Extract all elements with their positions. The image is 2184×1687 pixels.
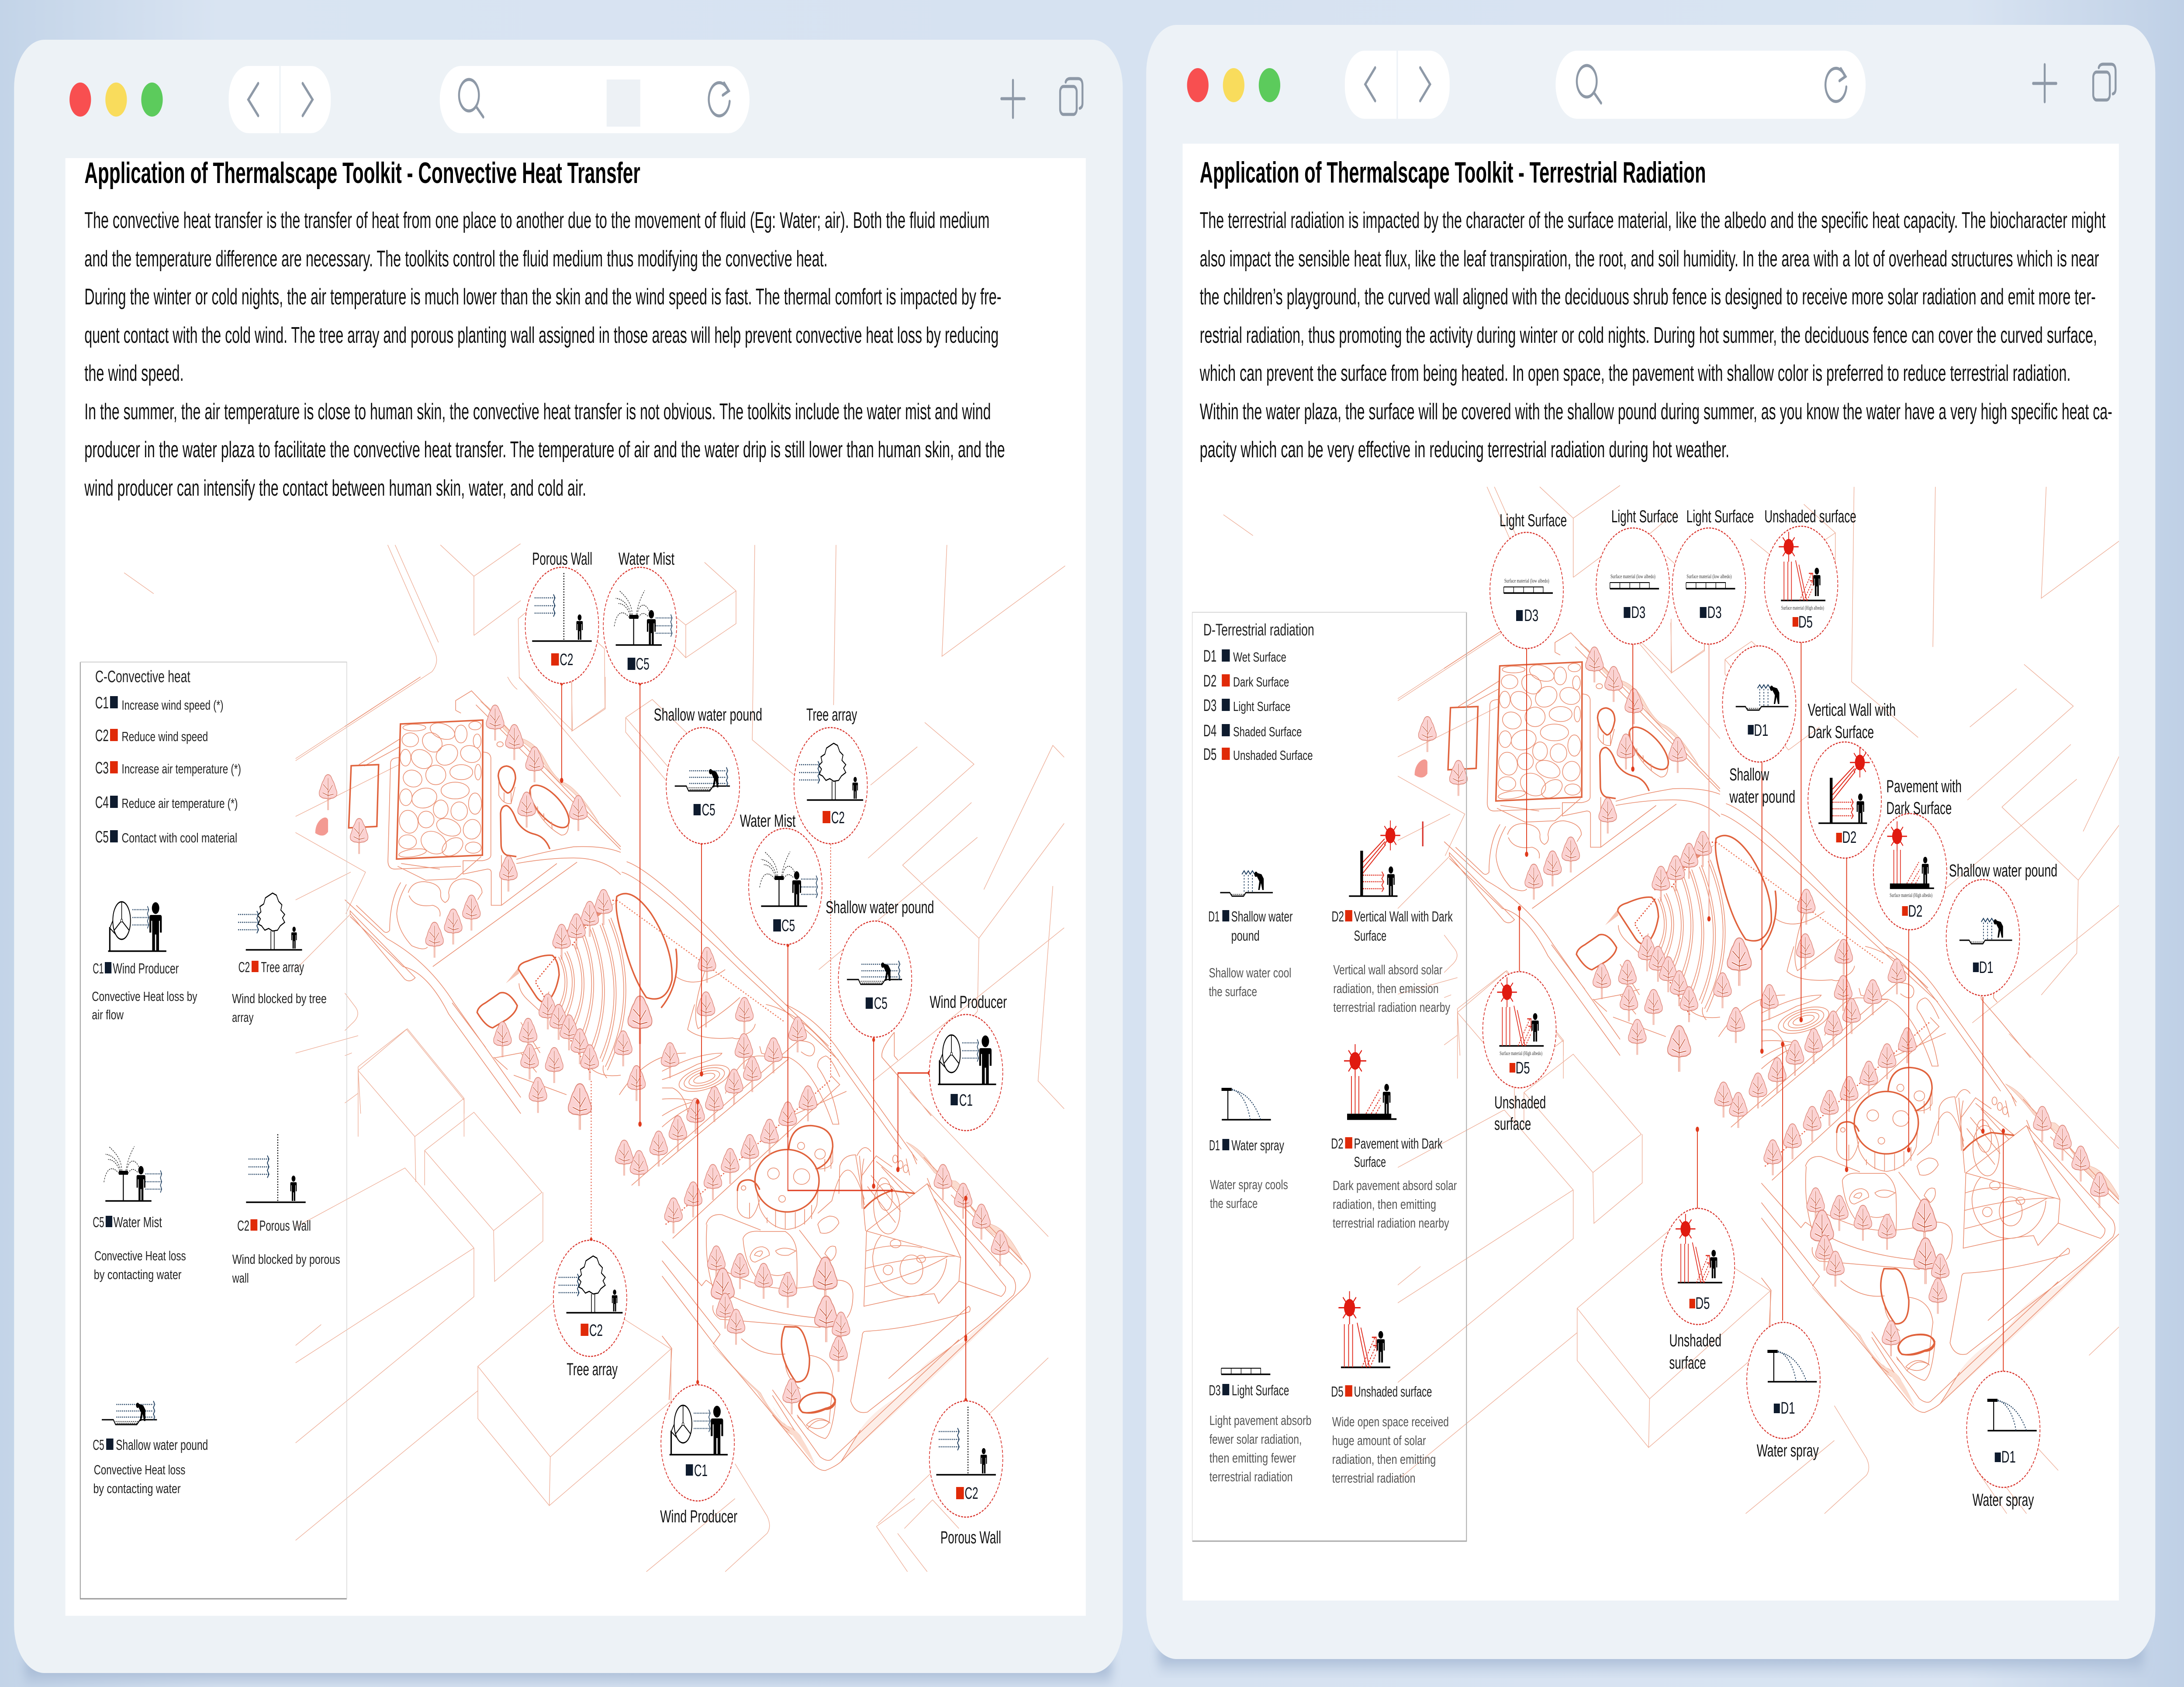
legend item: tree array: Tree array: [261, 959, 304, 975]
callout: vertical wall with dark surface: [1808, 700, 1896, 858]
callout: pavement with dark surface: D2: [1908, 901, 1922, 920]
legend key list: D2: [1203, 671, 1216, 690]
callout: tree array (bottom): C2: [589, 1321, 603, 1339]
legend item: water mist: by contacting water: [94, 1268, 182, 1282]
legend key list: D1: [1203, 646, 1216, 665]
callout: light surface 3: Light Surface: [1686, 507, 1754, 527]
callout: light surface 1: [1490, 511, 1567, 649]
callout: shallow water pound: C5: [702, 800, 715, 819]
callout: unshaded surface (top): Unshaded surface: [1764, 507, 1856, 527]
legend item: porous wall: C2: [237, 1218, 249, 1234]
legend item: wind producer: C1: [93, 960, 104, 976]
legend item: shallow water pound: by contacting water: [93, 1482, 181, 1496]
legend item: wind producer: air flow: [92, 1008, 124, 1022]
legend item: unshaded surface: Wide open space received: [1332, 1415, 1449, 1429]
callout: water spray (middle): Water spray: [1757, 1441, 1819, 1461]
legend item: shallow water pound: [93, 1401, 208, 1496]
callout: light surface 2: Light Surface: [1611, 507, 1678, 527]
legend item: vertical wall with dark surface: Vertical wall absord solar: [1333, 963, 1443, 977]
callout: tree array (top): C2: [831, 808, 845, 827]
panel: terrestrial radiation window: [1146, 25, 2164, 1666]
legend key list: Increase wind speed (*): [122, 698, 224, 713]
callout: porous wall (bottom): Porous Wall: [940, 1528, 1001, 1548]
legend item: water mist: [93, 1146, 186, 1282]
legend item: unshaded surface: Unshaded surface: [1354, 1383, 1432, 1400]
callout: wind producer (bottom): [660, 1385, 737, 1527]
window frame: [1146, 25, 2155, 1659]
callout: light surface 2: D3: [1631, 603, 1645, 621]
legend panel: terrestrial radiation: [1192, 612, 1466, 1541]
legend key list: Shaded Surface: [1233, 725, 1302, 739]
callout: light surface 1: D3: [1524, 606, 1538, 624]
callout: water mist (top): C5: [636, 654, 650, 673]
callout: porous wall (bottom): C2: [965, 1483, 978, 1502]
legend item: pavement with dark surface: Dark pavement absord solar: [1333, 1179, 1457, 1193]
callout: unshaded surface (left): surface: [1494, 1114, 1531, 1134]
legend key list: Reduce air temperature (*): [122, 797, 238, 811]
legend item: porous wall: Wind blocked by porous: [232, 1252, 340, 1267]
page content area: [1182, 144, 2119, 1601]
callout: shallow water pound (right): C5: [874, 994, 888, 1012]
callout: porous wall (top): [525, 549, 598, 683]
legend item: shallow water pound: Shallow water pound: [116, 1437, 208, 1453]
legend item: unshaded surface: [1331, 1291, 1449, 1486]
description text: the wind speed.: [84, 361, 184, 386]
description text: and the temperature difference are necessary. The toolkits control the fluid medium thus modifying the convective heat.: [84, 247, 828, 272]
legend item: water spray: the surface: [1210, 1197, 1258, 1211]
legend item: porous wall: wall: [232, 1271, 249, 1286]
legend item: vertical wall with dark surface: [1332, 821, 1453, 1015]
legend key list: Dark Surface: [1233, 675, 1289, 690]
legend item: unshaded surface: huge amount of solar: [1332, 1434, 1426, 1448]
callout: water mist (middle): Water Mist: [740, 811, 796, 831]
legend key list: [95, 693, 241, 846]
callout: shallow water pound: [654, 705, 762, 844]
legend key list: [1203, 646, 1313, 763]
callout: unshaded surface (bottom): [1661, 1208, 1735, 1373]
description text: also impact the sensible heat flux, like the leaf transpiration, the root, and soil humidity. In the area with a lot of overhead structures which is near: [1200, 247, 2099, 272]
title: Application of Thermalscape Toolkit - Terrestrial Radiation: [1200, 156, 1706, 190]
description text: In the summer, the air temperature is close to human skin, the convective heat transfer is not obvious. The toolkits include the water mist and wind: [84, 400, 991, 424]
legend item: light surface: Light Surface: [1232, 1382, 1289, 1398]
legend item: water spray: D1: [1209, 1137, 1220, 1153]
legend item: wind producer: [92, 902, 197, 1022]
leader lines: [560, 681, 968, 1402]
description text: the children’s playground, the curved wall aligned with the deciduous shrub fence is designed to receive more solar radiation and emit more ter-: [1200, 285, 2096, 310]
description text: During the winter or cold nights, the air temperature is much lower than the skin and the wind speed is fast. The thermal comfort is impacted by fre-: [84, 285, 1002, 310]
callout: light surface 3: Surface material (low albedo): [1686, 573, 1732, 580]
legend key list: D3: [1203, 696, 1216, 714]
legend key list: Unshaded Surface: [1233, 749, 1313, 763]
legend item: vertical wall with dark surface: terrestrial radiation nearby: [1333, 1000, 1450, 1015]
description text: [84, 208, 1005, 501]
callout: shallow water pound (upper): [1722, 646, 1796, 807]
callout: light surface 1: Surface material (low albedo): [1504, 578, 1549, 584]
callout: porous wall (top): Porous Wall: [532, 549, 592, 569]
legend item: shallow water pound: Convective Heat loss: [94, 1463, 185, 1477]
callout: light surface 2: [1596, 507, 1678, 644]
legend item: light surface: D3: [1209, 1382, 1221, 1398]
description text: Within the water plaza, the surface will be covered with the shallow pound during summer, as you know the water have a very high specific heat ca-: [1200, 400, 2112, 424]
legend item: wind producer: Wind Producer: [113, 960, 179, 976]
legend item: light surface: Light pavement absorb: [1209, 1414, 1311, 1428]
callout: light surface 3: D3: [1707, 603, 1722, 621]
title: Application of Thermalscape Toolkit - Convective Heat Transfer: [84, 157, 640, 190]
callout: wind producer (right): [930, 993, 1007, 1131]
legend key list: C1: [95, 693, 109, 712]
description text: [1199, 208, 2112, 462]
legend item: shallow water pound: Shallow water: [1231, 908, 1292, 925]
leader lines: [1518, 642, 2005, 1371]
callout: wind producer (bottom): Wind Producer: [660, 1507, 737, 1527]
legend item: unshaded surface: D5: [1331, 1383, 1344, 1400]
callout: tree array (bottom): [553, 1240, 627, 1380]
callout: water mist (top): [603, 549, 677, 683]
callout: water spray (right): Water spray: [1973, 1490, 2034, 1510]
legend item: water spray: [1209, 1088, 1288, 1211]
legend item: porous wall: Porous Wall: [259, 1218, 311, 1234]
callout: pavement with dark surface: Surface material (High albedo): [1890, 892, 1932, 899]
legend item: shallow water pound: D1: [1208, 908, 1220, 925]
callout: shallow water pound (right): [826, 898, 934, 1037]
callout: shallow water pound (upper): D1: [1754, 721, 1768, 739]
legend item: pavement with dark surface: Surface: [1354, 1154, 1386, 1170]
legend item: pavement with dark surface: [1331, 1044, 1457, 1231]
callout: water spray (right): D1: [2001, 1447, 2016, 1466]
legend item: water mist: Convective Heat loss: [94, 1249, 186, 1263]
callout: vertical wall with dark surface: Dark Surface: [1808, 723, 1874, 742]
callout: tree array (top): [794, 705, 867, 844]
legend heading: D-Terrestrial radiation: [1203, 620, 1314, 639]
legend item: pavement with dark surface: Pavement with Dark: [1354, 1135, 1443, 1152]
callout: unshaded surface (bottom): D5: [1696, 1294, 1710, 1312]
legend item: water mist: Water Mist: [114, 1214, 162, 1230]
callout: shallow water pound (upper): water pound: [1729, 787, 1795, 807]
legend item: tree array: array: [232, 1011, 253, 1025]
description text: wind producer can intensify the contact between human skin, water, and cold air.: [84, 476, 586, 501]
legend key list: C2: [95, 726, 109, 745]
legend item: shallow water pound: C5: [93, 1437, 104, 1453]
browser toolbar: [69, 66, 1082, 133]
callout: water spray (right): [1966, 1371, 2040, 1510]
callout: wind producer (right): C1: [959, 1090, 973, 1109]
callout: light surface 1: Light Surface: [1500, 511, 1567, 531]
callout: shallow water pound: Shallow water pound: [654, 705, 762, 725]
legend key list: C3: [95, 758, 109, 777]
callout: unshaded surface (left): Surface material (High albedo): [1500, 1050, 1542, 1057]
legend item: light surface: fewer solar radiation,: [1209, 1432, 1302, 1447]
callout: vertical wall with dark surface: D2: [1842, 828, 1856, 846]
legend key list: D4: [1203, 721, 1216, 740]
callout: water mist (top): Water Mist: [619, 549, 675, 569]
legend item: pavement with dark surface: radiation, then emitting: [1333, 1197, 1436, 1212]
callout: unshaded surface (bottom): surface: [1669, 1353, 1706, 1373]
callout: shallow water pound (right): Shallow water pound: [826, 898, 934, 918]
callout: unshaded surface (left): D5: [1516, 1058, 1530, 1077]
callout: light surface 2: Surface material (low albedo): [1610, 573, 1655, 580]
callout: tree array (bottom): Tree array: [567, 1360, 618, 1380]
callout: wind producer (bottom): C1: [694, 1461, 708, 1480]
callout: pavement with dark surface: Dark Surface: [1887, 799, 1952, 818]
legend item: shallow water pound: Shallow water cool: [1209, 966, 1291, 980]
callout: pavement with dark surface: Pavement with: [1887, 777, 1962, 797]
legend item: vertical wall with dark surface: D2: [1332, 908, 1344, 925]
callout: water spray (middle): [1747, 1322, 1820, 1461]
callout: water mist (middle): [740, 811, 822, 945]
description text: pacity which can be very effective in reducing terrestrial radiation during hot weather.: [1200, 438, 1729, 462]
callout: unshaded surface (top): D5: [1798, 612, 1813, 631]
site axonometric drawing: [1223, 486, 2164, 1514]
legend key list: Reduce wind speed: [122, 730, 208, 744]
legend item: tree array: [232, 893, 327, 1025]
description text: restrial radiation, thus promoting the activity during winter or cold nights. During hot summer, the deciduous fence can cover the curved surface,: [1200, 323, 2097, 348]
legend key list: Light Surface: [1233, 700, 1290, 714]
callout: shallow water pound (right): D1: [1979, 958, 1994, 976]
callout: pavement with dark surface: [1873, 777, 1962, 930]
red marker: [1422, 821, 1424, 846]
legend item: shallow water pound: pound: [1231, 928, 1260, 944]
legend key list: D5: [1203, 745, 1216, 763]
legend item: unshaded surface: radiation, then emitting: [1332, 1452, 1436, 1467]
legend key list: Wet Surface: [1233, 650, 1286, 665]
legend item: light surface: then emitting fewer: [1209, 1451, 1296, 1466]
description text: The convective heat transfer is the transfer of heat from one place to another due to the movement of fluid (Eg: Water; air). Both the fluid medium: [84, 208, 989, 233]
description text: quent contact with the cold wind. The tree array and porous planting wall assigned in those areas will help prevent convective heat loss by reducing: [84, 323, 999, 348]
description text: producer in the water plaza to facilitate the convective heat transfer. The temperature of air and the water drip is still lower than human skin, and the: [84, 438, 1005, 462]
callout: water spray (middle): D1: [1781, 1398, 1795, 1417]
legend item: water spray: Water spray cools: [1210, 1178, 1288, 1192]
legend item: unshaded surface: terrestrial radiation: [1332, 1471, 1415, 1486]
legend panel: convective heat: [80, 662, 347, 1599]
description text: which can prevent the surface from being heated. In open space, the pavement with shallow color is preferred to reduce terrestrial radiation.: [1199, 361, 2070, 386]
legend key list: Contact with cool material: [122, 831, 237, 845]
legend key list: C4: [95, 793, 109, 811]
callout: wind producer (right): Wind Producer: [930, 993, 1007, 1012]
callout: light surface 3: [1672, 507, 1754, 644]
legend item: tree array: Wind blocked by tree: [232, 992, 327, 1006]
legend item: porous wall: [232, 1134, 340, 1286]
callout: unshaded surface (top): [1764, 507, 1856, 642]
legend key list: Increase air temperature (*): [122, 762, 241, 776]
site axonometric drawing: [124, 544, 1065, 1572]
callout: porous wall (top): C2: [560, 650, 573, 669]
callout: vertical wall with dark surface: Vertical Wall with: [1808, 700, 1896, 720]
callout: unshaded surface (top): Surface material (High albedo): [1781, 605, 1824, 611]
callout: tree array (top): Tree array: [806, 705, 857, 725]
legend item: vertical wall with dark surface: Vertical Wall with Dark: [1354, 908, 1453, 925]
legend item: shallow water pound: [1208, 871, 1292, 999]
browser toolbar: [1187, 51, 2115, 119]
legend item: water spray: Water spray: [1231, 1137, 1284, 1153]
legend item: vertical wall with dark surface: radiation, then emission: [1333, 982, 1439, 996]
callout: water mist (middle): C5: [781, 916, 795, 935]
callout: shallow water pound (upper): Shallow: [1729, 765, 1769, 785]
legend item: vertical wall with dark surface: Surface: [1354, 928, 1386, 944]
legend item: shallow water pound: the surface: [1209, 985, 1257, 999]
callout: shallow water pound (right): Shallow water pound: [1949, 861, 2057, 881]
description text: The terrestrial radiation is impacted by the character of the surface material, like the albedo and the specific heat capacity. The biocharacter might: [1200, 208, 2106, 233]
legend item: water mist: C5: [93, 1214, 104, 1230]
window frame: [14, 40, 1123, 1673]
callout: shallow water pound (right): [1946, 861, 2057, 996]
legend heading: C-Convective heat: [95, 667, 190, 686]
legend key list: C5: [95, 827, 109, 846]
page content area: [66, 158, 1086, 1616]
callout: unshaded surface (left): [1483, 972, 1556, 1134]
legend item: pavement with dark surface: terrestrial radiation nearby: [1333, 1216, 1449, 1231]
legend item: tree array: C2: [238, 959, 250, 975]
legend item: wind producer: Convective Heat loss by: [92, 990, 197, 1004]
legend item: light surface: terrestrial radiation: [1209, 1470, 1292, 1484]
callout: porous wall (bottom): [930, 1401, 1003, 1548]
callout: unshaded surface (left): Unshaded: [1494, 1093, 1546, 1113]
legend item: pavement with dark surface: D2: [1331, 1135, 1344, 1152]
panel: convective heat transfer window: [14, 40, 1123, 1679]
legend item: light surface: [1209, 1368, 1311, 1484]
callout: unshaded surface (bottom): Unshaded: [1669, 1331, 1721, 1351]
